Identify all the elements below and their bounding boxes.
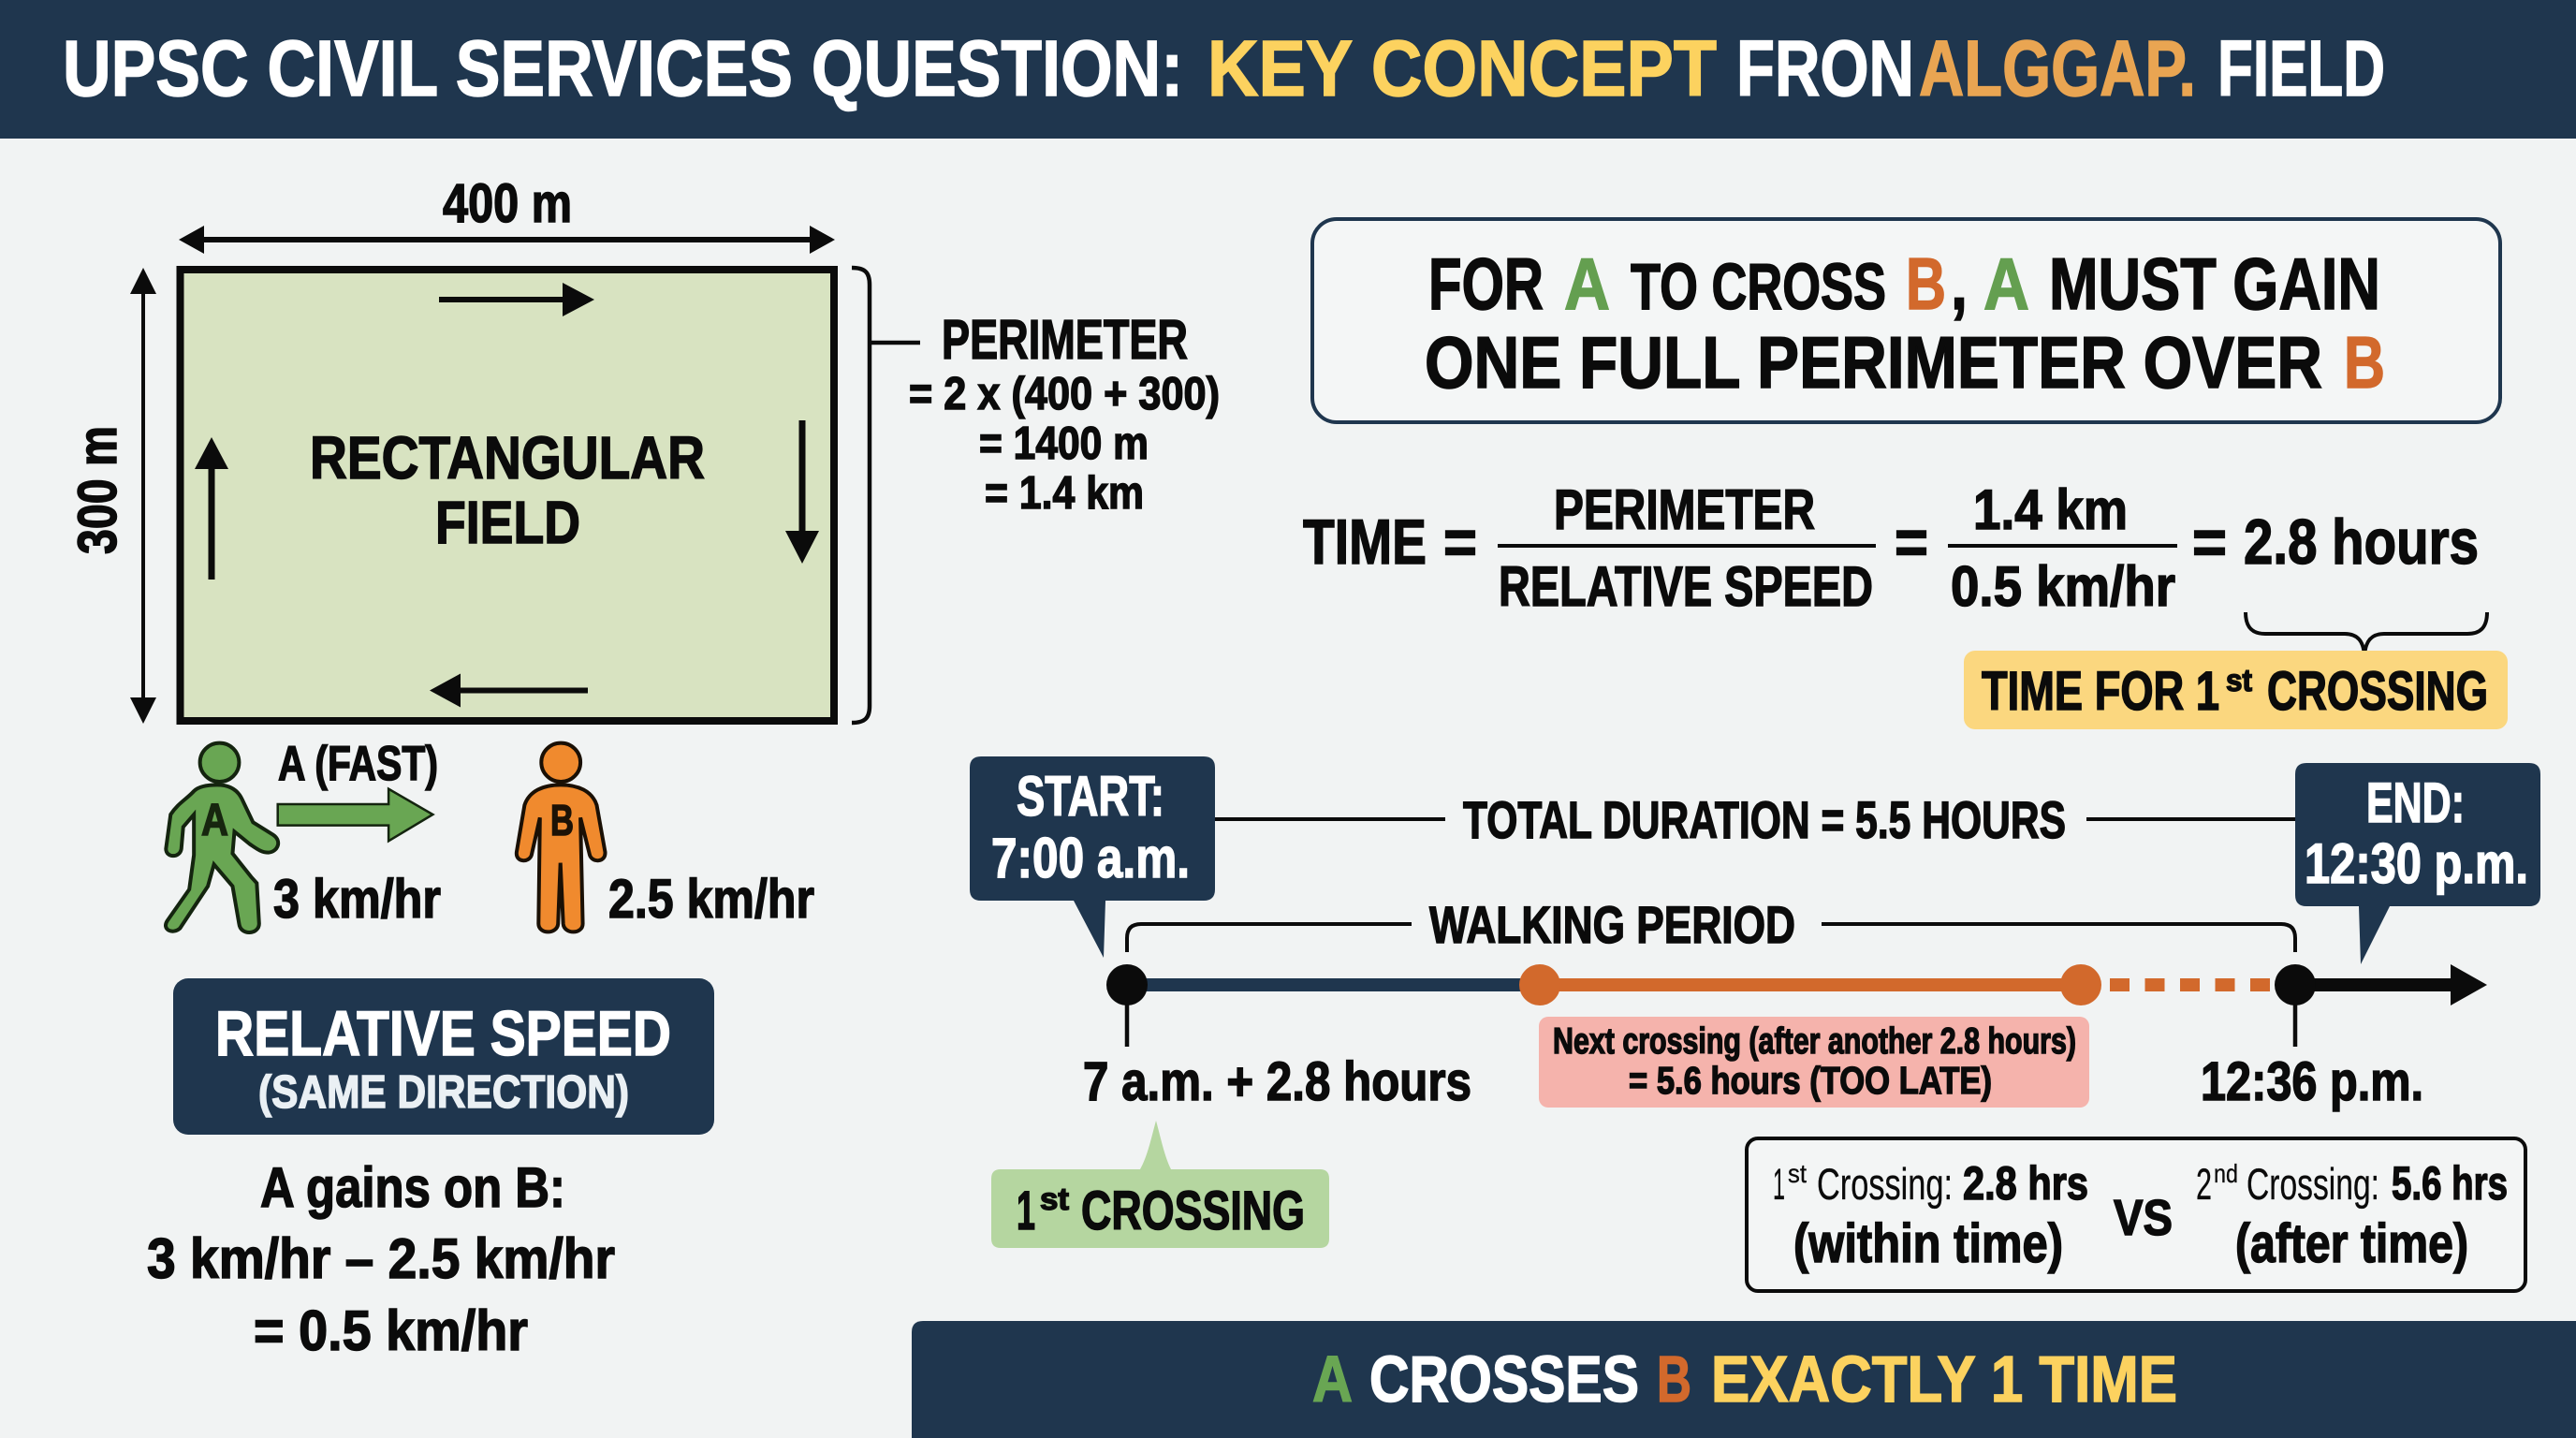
arrow: left clockwise (195, 437, 228, 580)
label: A speed: 3 km/hr (273, 869, 441, 930)
formula: time for first crossing: RELATIVE SPEED (1499, 555, 1873, 618)
first crossing summary: 1 (1773, 1159, 1785, 1209)
conclusion banner (912, 1321, 2576, 1438)
relative speed calculation: 3 km/hr – 2.5 km/hr (147, 1227, 615, 1290)
title banner: FIELD (2217, 24, 2385, 112)
title banner: UPSC CIVIL SERVICES QUESTION: (63, 24, 1183, 112)
formula: time for first crossing: = (2192, 506, 2227, 578)
height label: 300 m (67, 426, 128, 554)
walking period bracket (1127, 895, 2295, 954)
arrow: bottom clockwise (430, 674, 588, 708)
conclusion banner: B (1657, 1343, 1691, 1416)
callout: first crossing: CROSSING (1081, 1181, 1305, 1241)
callout: crossing condition: B (2344, 321, 2385, 404)
panel: timeline (970, 756, 2540, 1248)
perimeter calculation: = 2 x (400 + 300) (909, 369, 1220, 419)
relative speed calculation: = 0.5 km/hr (254, 1299, 528, 1362)
second crossing summary: (after time) (2235, 1213, 2468, 1274)
arrow: height dimension (130, 268, 156, 724)
label: time for first crossing: TIME FOR 1 (1982, 661, 2219, 722)
callout: end: END: (2366, 771, 2465, 834)
perimeter bracket (852, 268, 920, 723)
second crossing summary: 2 (2196, 1159, 2212, 1209)
label: second crossing time: 12:36 p.m. (2201, 1051, 2423, 1112)
callout: next crossing: = 5.6 hours (TOO LATE) (1629, 1059, 1992, 1102)
relative speed calculation: A gains on B: (260, 1156, 565, 1219)
arrow: top clockwise (439, 283, 594, 316)
conclusion banner: A (1312, 1343, 1353, 1416)
label: time for first crossing: CROSSING (2267, 661, 2488, 722)
second crossing summary: 5.6 hrs (2392, 1157, 2508, 1210)
callout: crossing condition: A (1564, 242, 1610, 325)
perimeter calculation: = 1400 m (979, 418, 1149, 469)
width label: 400 m (443, 173, 572, 234)
callout: first crossing (991, 1121, 1329, 1248)
callout: crossing condition: A (1983, 242, 2029, 325)
total duration span: TOTAL DURATION = 5.5 HOURS (1463, 790, 2066, 849)
title banner (0, 0, 2576, 139)
formula: time for first crossing: = (1895, 506, 1928, 578)
callout: next crossing (1539, 1017, 2089, 1108)
conclusion banner: EXACTLY 1 TIME (1711, 1343, 2177, 1416)
icon: walker A (166, 743, 278, 932)
first crossing summary: st (1788, 1159, 1807, 1188)
callout: start: 7:00 a.m. (991, 827, 1190, 889)
formula: time for first crossing: TIME (1303, 506, 1427, 578)
callout: start (970, 756, 1215, 958)
perimeter calculation: PERIMETER (942, 309, 1188, 371)
formula: time for first crossing: 0.5 km/hr (1951, 555, 2175, 618)
field label (310, 424, 705, 556)
callout: crossing condition (1312, 219, 2500, 422)
callout: start: START: (1017, 765, 1164, 828)
formula: time for first crossing (1303, 478, 2479, 618)
callout: crossing condition: FOR (1428, 242, 1544, 325)
label: time for first crossing (1964, 651, 2508, 729)
second crossing summary: nd (2214, 1159, 2238, 1188)
first crossing summary: 2.8 hrs (1963, 1157, 2088, 1210)
second crossing summary (2196, 1157, 2508, 1274)
title banner: FRON (1736, 24, 1914, 112)
conclusion banner: CROSSES (1369, 1343, 1639, 1416)
field rectangle (180, 270, 834, 721)
arrow: width dimension (179, 226, 835, 254)
callout: crossing condition: B (1906, 242, 1946, 325)
callout: first crossing: 1 (1017, 1181, 1035, 1241)
relative speed badge (173, 978, 714, 1135)
title banner: ALGGAP. (1919, 24, 2196, 112)
brace: 2.8 hours (2246, 612, 2487, 659)
panel: relative speed (147, 978, 714, 1362)
relative speed calculation (147, 1156, 615, 1362)
second crossing summary: Crossing: (2247, 1159, 2379, 1209)
callout: next crossing: Next crossing (after another 2.8 hours) (1553, 1021, 2076, 1062)
callout: crossing condition: MUST GAIN (2049, 242, 2380, 325)
formula: time for first crossing: PERIMETER (1554, 478, 1815, 541)
icon: walker B: B (550, 796, 574, 844)
first crossing summary: Crossing: (1817, 1159, 1953, 1209)
label: A fast: A (FAST) (278, 737, 438, 791)
callout: end: 12:30 p.m. (2305, 832, 2528, 895)
callout: crossing condition: ONE FULL PERIMETER OVER (1425, 321, 2322, 404)
icon: walker B (517, 743, 606, 932)
formula: time for first crossing: 2.8 hours (2244, 506, 2479, 578)
arrow: A direction (278, 789, 432, 841)
timeline track (1106, 964, 2487, 1047)
first crossing summary (1773, 1157, 2088, 1274)
versus label: VS (2114, 1190, 2173, 1246)
formula: time for first crossing: 1.4 km (1973, 478, 2128, 541)
panel: crossing comparison (1747, 1138, 2525, 1291)
label: time for first crossing: st (2226, 663, 2252, 697)
callout: crossing condition: , (1951, 242, 1968, 325)
arrow: right clockwise (785, 420, 819, 564)
relative speed badge: RELATIVE SPEED (215, 998, 671, 1069)
callout: crossing condition: TO CROSS (1631, 250, 1886, 323)
relative speed badge: (SAME DIRECTION) (258, 1067, 629, 1118)
label: B speed: 2.5 km/hr (608, 869, 814, 930)
perimeter calculation (909, 309, 1220, 519)
panel: rectangular field diagram (67, 173, 1220, 724)
formula: time for first crossing: = (1443, 506, 1477, 578)
callout: first crossing: st (1040, 1181, 1069, 1216)
callout: end (2295, 763, 2540, 964)
walking period bracket: WALKING PERIOD (1429, 895, 1795, 954)
icon: walker A: A (201, 796, 228, 845)
field label: RECTANGULAR (310, 424, 705, 492)
panel: walkers (166, 737, 814, 932)
field label: FIELD (435, 489, 580, 556)
perimeter calculation: = 1.4 km (985, 468, 1144, 519)
title banner: KEY CONCEPT (1208, 24, 1717, 112)
first crossing summary: (within time) (1793, 1213, 2063, 1274)
label: first crossing time: 7 a.m. + 2.8 hours (1083, 1051, 1471, 1112)
